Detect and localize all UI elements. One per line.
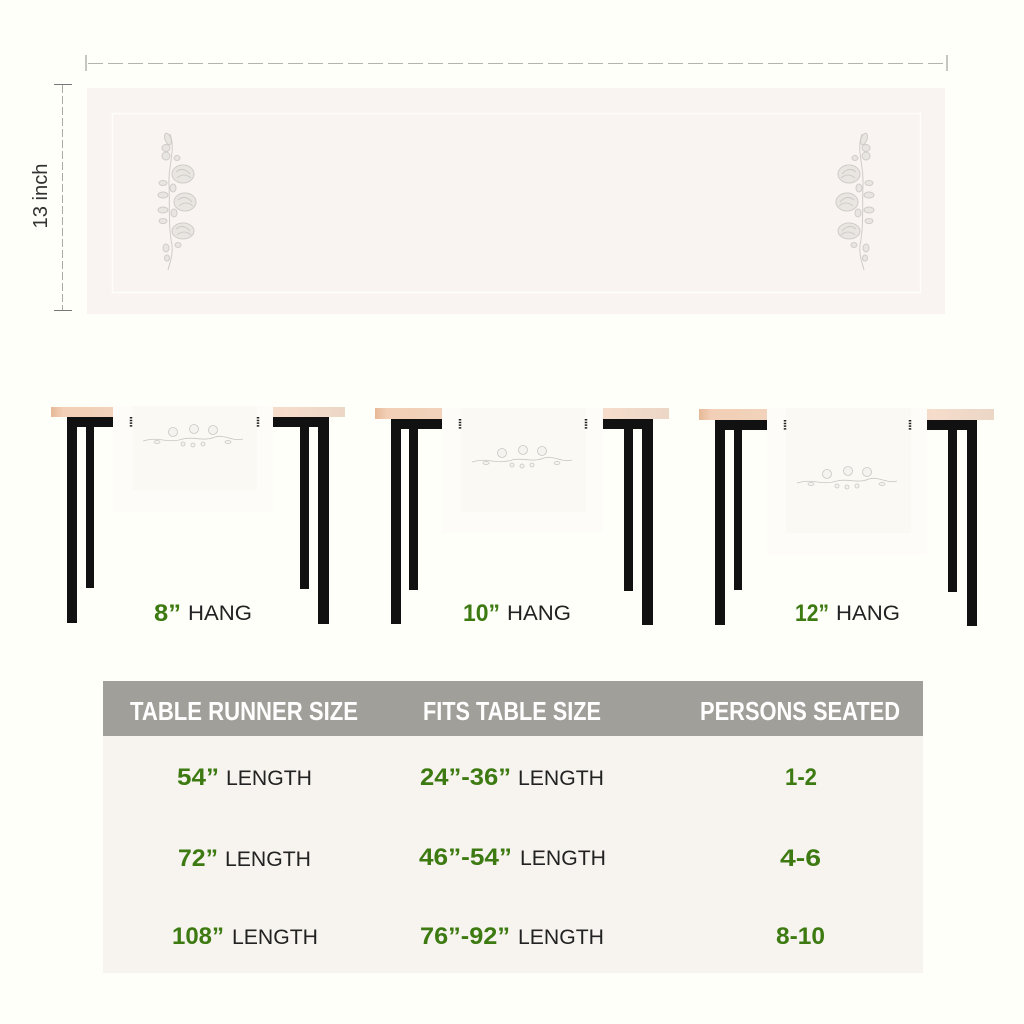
label: 10 inch hang <box>463 600 571 627</box>
label: 8 inch hang: HANG <box>188 602 252 625</box>
table header: TABLE RUNNER SIZE <box>130 696 358 726</box>
table: 8 inch hang <box>51 406 345 624</box>
row 2: LENGTH <box>225 848 311 871</box>
label: 8 inch hang: 8” <box>154 600 181 627</box>
row 3 <box>172 923 825 950</box>
row 1: LENGTH <box>226 767 312 790</box>
row 1: 24”-36” <box>420 764 511 791</box>
table: 10 inch hang <box>375 408 669 625</box>
row 1: LENGTH <box>518 767 604 790</box>
embroidery: right floral sprig <box>836 132 874 270</box>
label: 10 inch hang: 10” <box>463 600 500 627</box>
label: 12 inch hang <box>795 600 900 627</box>
table runner flat view <box>87 88 945 314</box>
row 3: 76”-92” <box>420 923 510 950</box>
row 2: LENGTH <box>520 847 606 870</box>
table: 12 inch hang <box>699 408 994 626</box>
row 3: 8-10 <box>776 923 825 950</box>
row 3: LENGTH <box>232 926 318 949</box>
row 2: 72” <box>178 845 218 872</box>
row 2: 4-6 <box>780 845 821 872</box>
table header: FITS TABLE SIZE <box>423 696 601 726</box>
row 1 <box>177 764 817 791</box>
table header: PERSONS SEATED <box>700 696 900 726</box>
table body <box>103 736 923 973</box>
label: 10 inch hang: HANG <box>507 602 571 625</box>
table header <box>103 681 923 736</box>
size table <box>103 681 923 973</box>
row 1: 54” <box>177 764 219 791</box>
row 3: 108” <box>172 923 224 950</box>
height dimension line <box>54 84 72 310</box>
width dimension line <box>86 55 947 71</box>
label: 12 inch hang: HANG <box>836 602 900 625</box>
label: 12 inch hang: 12” <box>795 600 829 627</box>
row 2: 46”-54” <box>419 844 512 871</box>
label: 8 inch hang <box>154 600 252 627</box>
height label: 13 inch: 13 inch <box>30 164 52 228</box>
row 1: 1-2 <box>785 764 817 791</box>
embroidery: left floral sprig <box>158 132 196 270</box>
row 3: LENGTH <box>518 926 604 949</box>
row 2 <box>178 844 821 872</box>
